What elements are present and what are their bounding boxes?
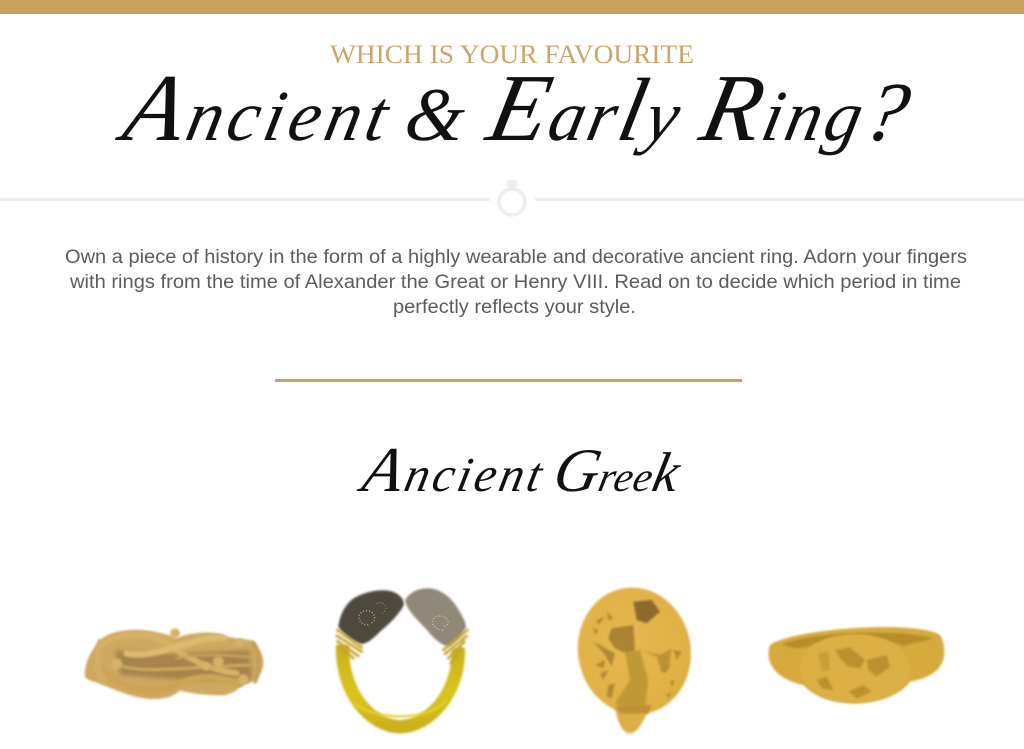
title: Ancient xyxy=(110,54,402,161)
title: & xyxy=(401,73,469,157)
intro paragraph: Own a piece of history in the form of a highly wearable and decorative ancient ring. Adorn your fingers xyxy=(65,247,967,268)
ring: signet with beast xyxy=(769,627,944,703)
title: Early xyxy=(478,54,693,161)
eyebrow heading: WHICH IS YOUR FAVOURITE xyxy=(330,40,694,69)
icon: ring xyxy=(499,180,525,215)
section heading: Ancient xyxy=(353,434,551,505)
section heading: Greek xyxy=(548,436,688,505)
top gold bar xyxy=(0,0,1024,14)
intro paragraph: with rings from the time of Alexander the Great or Henry VIII. Read on to decide which period in time xyxy=(69,272,961,293)
ring: knot ring xyxy=(85,628,263,699)
intro paragraph: perfectly reflects your style. xyxy=(393,297,636,318)
section heading xyxy=(353,434,688,505)
title xyxy=(110,54,920,161)
ring: intaglio with figure xyxy=(568,579,701,733)
gold section rule xyxy=(275,379,742,382)
divider with ring icon xyxy=(0,180,1024,215)
ring: gold hoop with stones xyxy=(337,588,467,727)
intro paragraph xyxy=(65,247,967,318)
title: Ring? xyxy=(692,54,920,161)
